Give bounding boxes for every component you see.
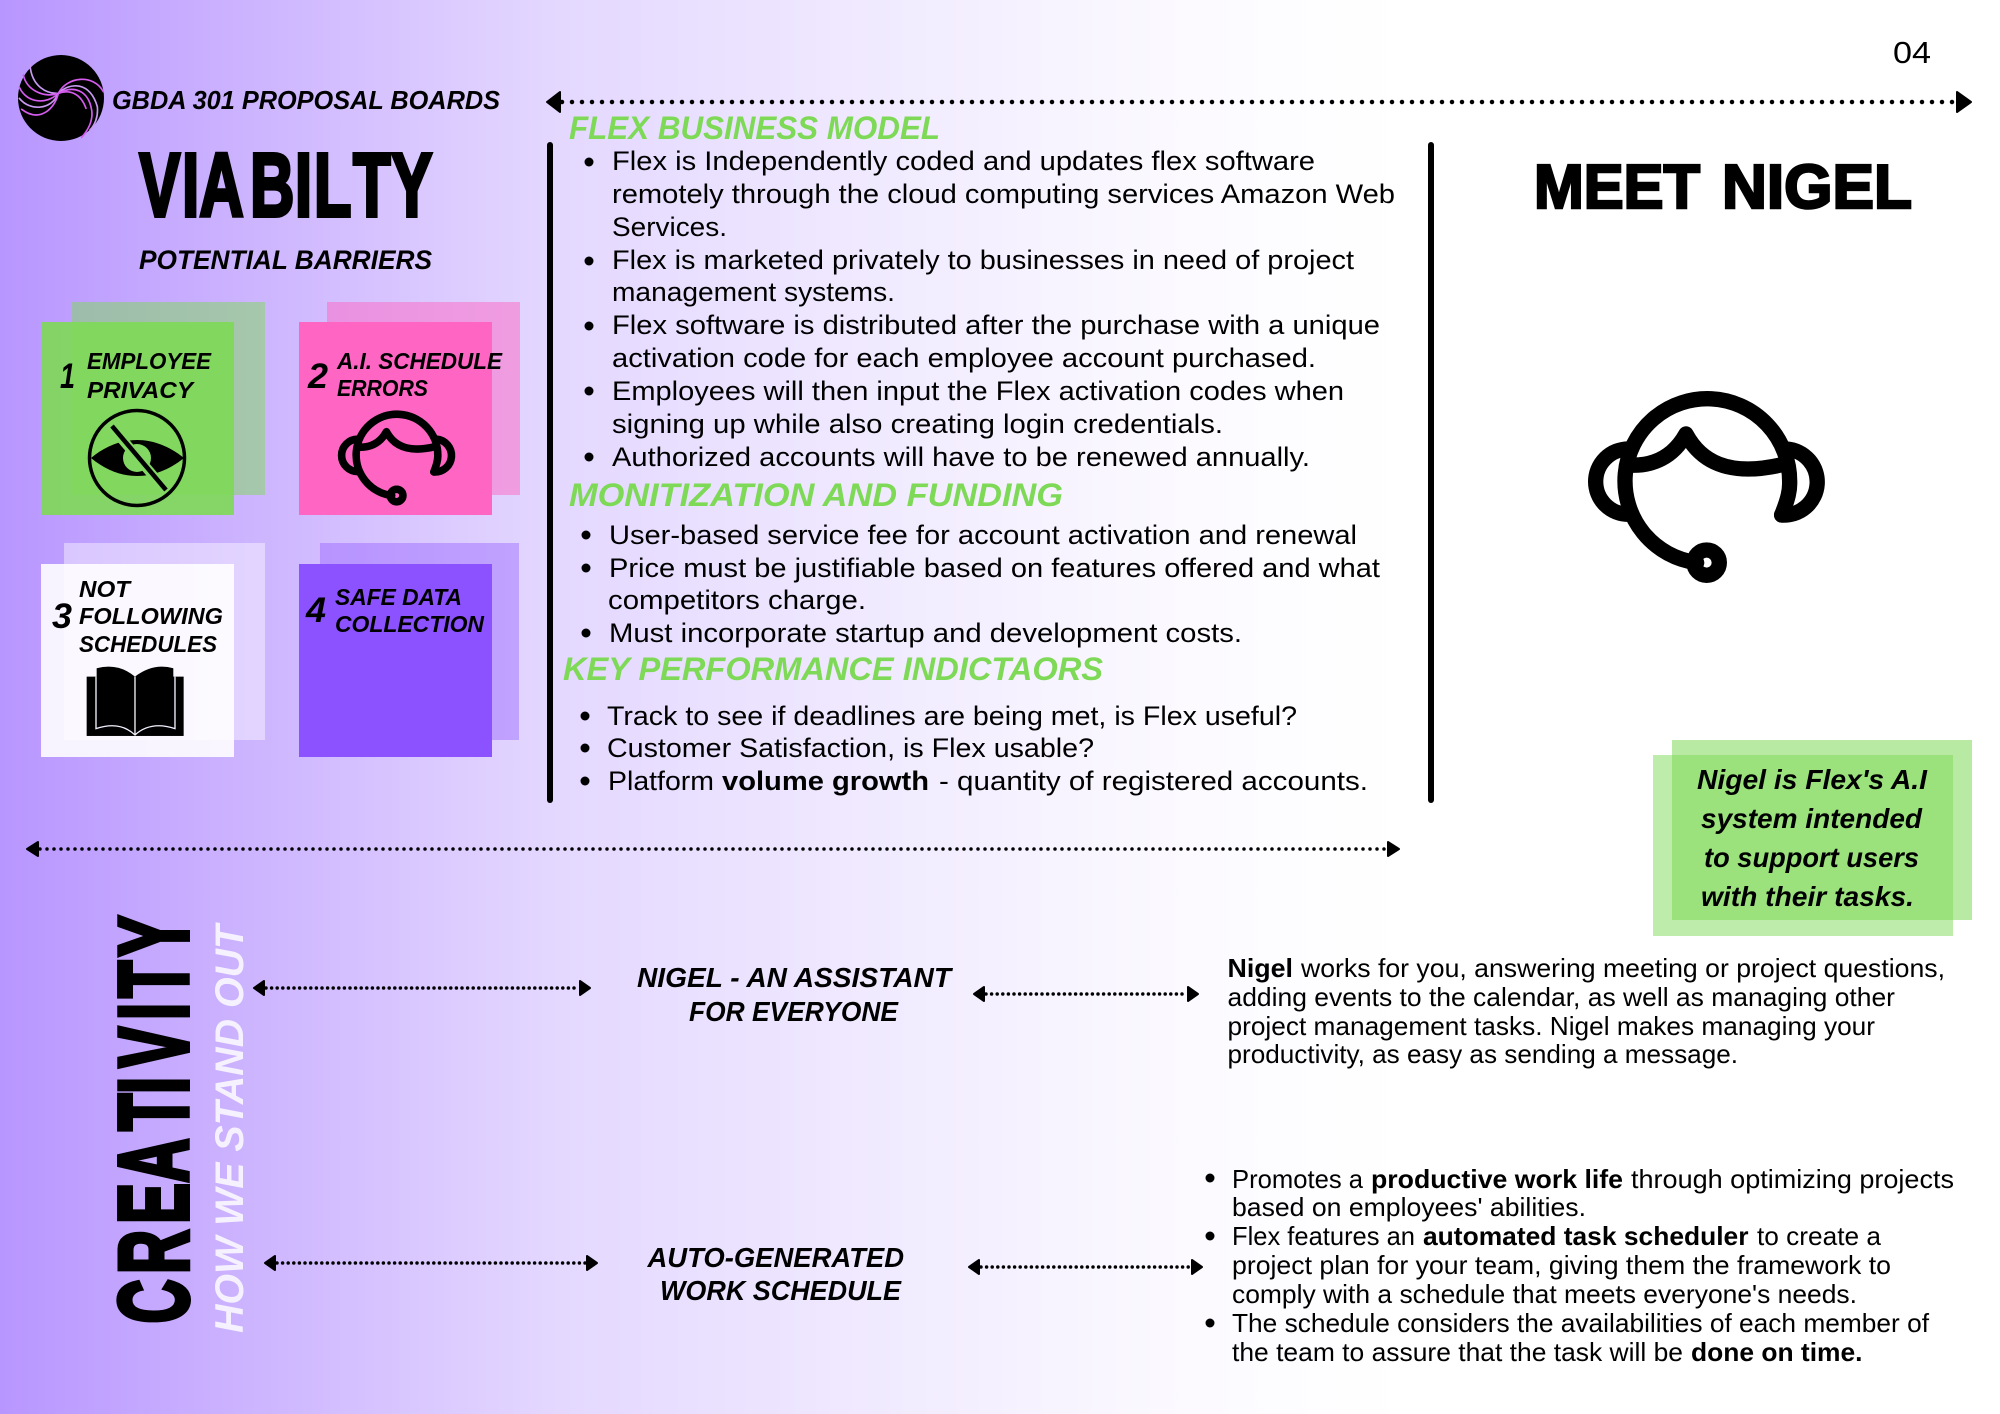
panel: barrier 2 ai schedule errors: 2 <box>307 357 329 396</box>
panel: barrier 4 safe data collection: SAFE DATA <box>335 584 462 610</box>
panel: barrier 1 employee privacy: PRIVACY <box>87 377 196 403</box>
callout: nigel description <box>1653 740 1972 936</box>
text block: nigel description: productivity, as easy as sending a message. <box>1228 1039 1738 1069</box>
text block: schedule bullets: productive work life <box>1371 1164 1623 1194</box>
arrow: auto-generated schedule to description <box>969 1260 1202 1274</box>
panel: barrier 1 employee privacy: EMPLOYEE <box>87 348 212 374</box>
text block: business model bullets <box>584 146 1395 472</box>
text block: schedule bullets: the team to assure that the task will be <box>1232 1337 1683 1367</box>
heading: meet nigel <box>1534 153 1912 222</box>
text block: business model bullets: Services. <box>612 212 727 242</box>
label: nigel an assistant for everyone <box>637 962 954 1027</box>
heading: monitization and funding: MONITIZATION AND FUNDING <box>569 477 1063 513</box>
panel: barrier 2 ai schedule errors: A.I. SCHEDULE <box>336 348 503 374</box>
text block: funding bullets <box>582 520 1381 648</box>
text block: kpi bullets: volume growth <box>722 766 929 796</box>
panel: barrier 4 safe data collection <box>299 543 519 757</box>
panel: barrier 3 not following schedules: 3 <box>52 597 73 636</box>
text block: funding bullets: User-based service fee for account activation and renewal <box>609 520 1357 550</box>
label: auto-generated work schedule: WORK SCHEDULE <box>660 1275 902 1306</box>
middle double arrow <box>27 842 1399 856</box>
header label: GBDA 301 PROPOSAL BOARDS <box>112 85 501 115</box>
arrow: creativity to nigel assistant <box>254 981 590 995</box>
callout: nigel description: to support users <box>1704 842 1919 873</box>
label: auto-generated work schedule: AUTO-GENERATED <box>647 1242 904 1273</box>
panel: barrier 4 safe data collection: COLLECTION <box>335 611 484 637</box>
panel: barrier 3 not following schedules <box>41 543 265 757</box>
title: viability: VIABILTY <box>139 135 432 236</box>
text block: nigel description <box>1228 953 1945 1069</box>
page number: 04 <box>1893 35 1931 70</box>
panel: barrier 3 not following schedules: FOLLOWING <box>79 603 223 629</box>
panel: barrier 3 not following schedules: SCHEDULES <box>79 631 218 657</box>
title: creativity: CREATIVITY <box>100 916 209 1323</box>
text block: nigel description: works for you, answering meeting or project questions, <box>1300 953 1945 983</box>
panel: barrier 2 ai schedule errors <box>299 302 520 515</box>
text block: business model bullets: Authorized accounts will have to be renewed annually. <box>612 442 1310 472</box>
text block: business model bullets: Flex is Independently coded and updates flex software <box>612 146 1315 176</box>
text block: schedule bullets: project plan for your team, giving them the framework to <box>1232 1250 1891 1280</box>
text block: schedule bullets <box>1206 1164 1954 1367</box>
left column divider <box>547 145 553 800</box>
text block: schedule bullets: to create a <box>1757 1221 1882 1251</box>
text block: schedule bullets: comply with a schedule that meets everyone's needs. <box>1232 1279 1857 1309</box>
callout: nigel description: system intended <box>1701 803 1923 834</box>
panel: barrier 1 employee privacy: 1 <box>60 357 75 396</box>
text block: schedule bullets: through optimizing projects <box>1631 1164 1954 1194</box>
subtitle: how we stand out: HOW WE STAND OUT <box>208 921 252 1333</box>
text block: kpi bullets: - quantity of registered accounts. <box>939 766 1368 796</box>
text block: kpi bullets: Platform <box>608 766 714 796</box>
subtitle: potential barriers: POTENTIAL BARRIERS <box>139 245 432 275</box>
text block: nigel description: Nigel <box>1228 953 1293 983</box>
panel: barrier 4 safe data collection: 4 <box>305 591 326 630</box>
text block: business model bullets: management systems. <box>612 277 895 307</box>
text block: schedule bullets: automated task scheduler <box>1423 1221 1748 1251</box>
label: nigel an assistant for everyone: NIGEL - AN ASSISTANT <box>637 962 954 993</box>
text block: nigel description: adding events to the calendar, as well as managing other <box>1228 982 1895 1012</box>
label: nigel an assistant for everyone: FOR EVERYONE <box>689 996 899 1027</box>
panel: barrier 2 ai schedule errors: ERRORS <box>337 375 429 401</box>
text block: business model bullets: signing up while also creating login credentials. <box>612 409 1223 439</box>
text block: schedule bullets: Promotes a <box>1232 1164 1364 1194</box>
icon: large headset <box>1596 399 1817 575</box>
callout: nigel description: with their tasks. <box>1701 881 1914 912</box>
arrow: nigel assistant to description <box>974 987 1198 1001</box>
text block: business model bullets: Employees will then input the Flex activation codes when <box>612 376 1344 406</box>
text block: nigel description: project management tasks. Nigel makes managing your <box>1228 1011 1875 1041</box>
right column divider <box>1428 145 1434 800</box>
icon: crossed-out eye <box>90 410 184 506</box>
text block: business model bullets: activation code for each employee account purchased. <box>612 343 1316 373</box>
text block: schedule bullets: The schedule considers the availabilities of each member of <box>1232 1308 1930 1338</box>
text block: schedule bullets: Flex features an <box>1232 1221 1415 1251</box>
text block: business model bullets: Flex software is distributed after the purchase with a unique <box>612 310 1380 340</box>
heading: key performance indicators: KEY PERFORMANCE INDICTAORS <box>563 651 1104 687</box>
heading: flex business model: FLEX BUSINESS MODEL <box>569 110 940 146</box>
logo <box>18 55 104 141</box>
text block: schedule bullets: based on employees' abilities. <box>1232 1192 1586 1222</box>
text block: funding bullets: Price must be justifiable based on features offered and what <box>609 553 1381 583</box>
heading: meet nigel: MEET <box>1534 153 1700 222</box>
icon: small headset <box>342 414 451 502</box>
text block: funding bullets: Must incorporate startup and development costs. <box>609 618 1242 648</box>
heading: meet nigel: NIGEL <box>1722 153 1912 222</box>
label: auto-generated work schedule <box>647 1242 904 1306</box>
callout: nigel description: Nigel is Flex's A.I <box>1697 764 1928 795</box>
panel: barrier 3 not following schedules: NOT <box>79 576 132 602</box>
panel: barrier 1 employee privacy <box>41 302 265 515</box>
text block: schedule bullets: done on time. <box>1691 1337 1862 1367</box>
top double arrow <box>547 92 1971 112</box>
text block: business model bullets: Flex is marketed privately to businesses in need of project <box>612 245 1355 275</box>
text block: funding bullets: competitors charge. <box>608 585 866 615</box>
text block: business model bullets: remotely through the cloud computing services Amazon Web <box>612 179 1395 209</box>
icon: open book <box>87 667 184 736</box>
text block: kpi bullets: Customer Satisfaction, is Flex usable? <box>607 733 1094 763</box>
arrow: creativity to auto-generated schedule <box>265 1256 597 1270</box>
text block: kpi bullets: Track to see if deadlines are being met, is Flex useful? <box>607 701 1297 731</box>
text block: kpi bullets <box>580 701 1368 796</box>
